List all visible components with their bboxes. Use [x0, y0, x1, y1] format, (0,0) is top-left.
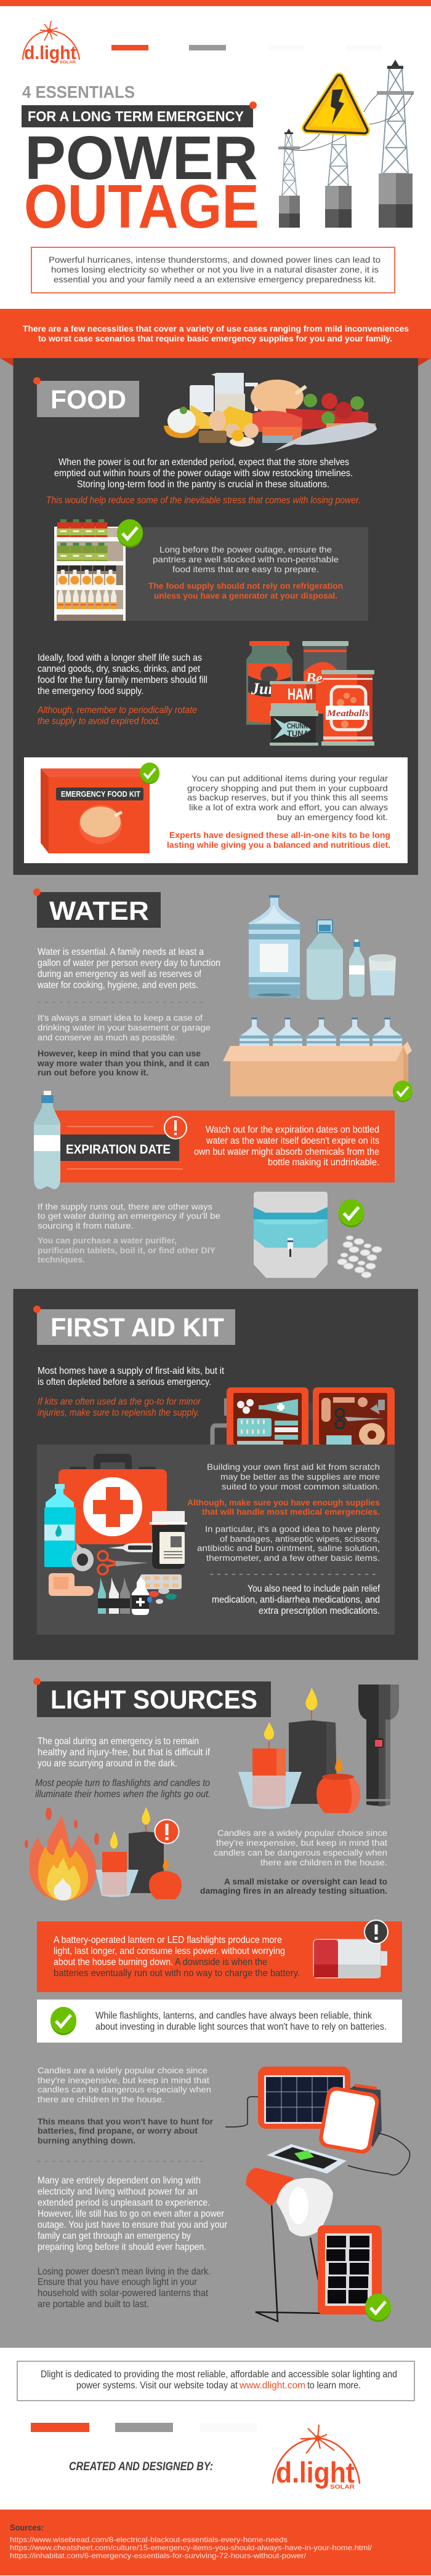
icon: warning [155, 1820, 179, 1843]
orange banner: There are a few necessities that cover a variety of use cases ranging from mild inconveniences [23, 324, 409, 333]
text block: case of water: and conserve as much as possible. [38, 1032, 177, 1042]
illustration: case of bottles [223, 1018, 412, 1096]
icon: warning [365, 1920, 388, 1944]
sub-panel: pantry: The food supply should not rely on refrigeration [148, 581, 343, 591]
illustration: candles and flashlight [238, 1685, 399, 1813]
sub-panel: building a kit [37, 1445, 395, 1635]
panel: food [14, 358, 418, 875]
beef can: Beef [305, 671, 335, 687]
intro text box: homes losing electricity so whether or not you live in a natural disaster zone, it is [51, 265, 379, 274]
text block: building kit: of bandages, antiseptic wipes, scissors, [220, 1534, 380, 1544]
candle in glass [238, 1722, 302, 1809]
orange banner: to worst case scenarios that require basic emergency supplies for you and your family. [38, 333, 392, 343]
text block: candles repeated: burning anything down. [38, 2135, 135, 2145]
text block: shelf life: the supply to avoid expired food. [38, 716, 160, 727]
tall tower [377, 60, 414, 228]
heading: light sources: LIGHT SOURCES [50, 1685, 257, 1715]
sub-panel: pantry: Long before the power outage, ensure the [159, 544, 332, 554]
text block: first-aid supply [38, 1366, 224, 1418]
text block: shelf life: Although, remember to periodically rotate [37, 705, 197, 716]
tuna can: CHUNK [287, 722, 308, 730]
callout: expiration date: EXPIRATION DATE [66, 1142, 171, 1157]
text block: candles repeated: there are children in the house. [38, 2094, 164, 2104]
ham can [270, 681, 318, 711]
text block: living without power: However, life still has to go on even after a power [38, 2209, 225, 2219]
text block: shelf life: canned goods, dry, snacks, drinks, and pet [38, 664, 200, 674]
intro text box: Powerful hurricanes, intense thunderstorms, and downed power lines can lead to [49, 255, 381, 265]
icon: check [50, 2007, 76, 2035]
heading: food [33, 377, 139, 417]
text block: first-aid supply: Most homes have a supply of first-aid kits, but it [38, 1366, 224, 1376]
callout: expiration date: Watch out for the expiration dates on bottled [206, 1125, 379, 1135]
callout: batteries: A downside is when the [175, 1957, 267, 1968]
callout: expiration date: own but water might absorb chemicals from the [194, 1147, 379, 1157]
large jug [249, 895, 300, 998]
icon: check [140, 763, 159, 784]
text block: candles repeated: Candles are a widely popular choice since [38, 2065, 207, 2075]
illustration: open first aid case [212, 1387, 395, 1446]
juice jar [246, 641, 292, 725]
text block: living without power [38, 2175, 228, 2310]
text block: living without power: preparing long before it should ever happen. [38, 2242, 206, 2252]
logo: d.light solar footer [273, 2425, 360, 2490]
text block: case of water: drinking water in your basement or garage [38, 1023, 211, 1032]
title [22, 82, 259, 241]
text block: candle dangers: damaging fires in an already testing situation. [200, 1886, 387, 1896]
illustration: food kit box: EMERGENCY FOOD KIT [61, 789, 140, 799]
illustration: medical supplies [44, 1454, 187, 1615]
text block: dark emergencies [35, 1736, 211, 1800]
heading: first aid kit: FIRST AID KIT [50, 1313, 224, 1342]
scissors [98, 1551, 148, 1574]
subtitle bar [22, 102, 257, 127]
middle tower [325, 134, 352, 228]
sub-panel: emergency food kit: buy an emergency food kit. [277, 812, 388, 822]
sources footer: https://www.wisebread.com/8-electrical-blackout-essentials-every-home-needs [10, 2535, 288, 2544]
text block: water needs: gallon of water per person every day to function [38, 958, 220, 968]
closing statement box: power systems. Visit our website today at [76, 2380, 238, 2391]
closing statement box [17, 2361, 414, 2401]
callout: expiration date [52, 1111, 395, 1182]
intro text box: essential you and your family need a an extensive emergency preparedness kit. [54, 274, 376, 284]
sub-panel: pantry: food items that are easy to prepare. [172, 564, 319, 574]
icon: check [339, 1199, 365, 1227]
juice jar: Juice [251, 680, 287, 698]
text block: water needs: Water is essential. A family needs at least a [38, 947, 204, 957]
text block: candles repeated: candles can be dangerous especially when [38, 2084, 211, 2094]
icon: battery [313, 1939, 387, 1978]
sub-panel: emergency food kit [24, 757, 408, 863]
callout: batteries: light, last longer, and consume less power. without worrying [54, 1946, 285, 1956]
loose pills [147, 1588, 177, 1604]
panel: first aid kit [14, 1289, 418, 1660]
text block: building kit: thermometer, and a few other basic items. [206, 1553, 380, 1563]
closing statement box: to learn more. [307, 2380, 361, 2391]
vials [98, 1577, 130, 1614]
text block: store shelves: When the power is out for an extended period, expect that the store shelves [58, 457, 349, 468]
water bottle [44, 1484, 76, 1567]
decorative bars bottom [31, 2423, 257, 2432]
illustration: candle group [95, 1807, 182, 1899]
pill bottle [150, 1511, 187, 1569]
small tower [278, 129, 300, 228]
text block: other water sources: to get water during an emergency if you'll be [38, 1211, 220, 1221]
text block: building kit: may be better as the supplies are more [220, 1472, 380, 1481]
heading: light sources [33, 1678, 271, 1717]
round candle [316, 1757, 360, 1813]
text block: case of water: way more water than you think, and it can [37, 1058, 209, 1068]
text block: case of water [37, 1013, 211, 1077]
icon: check [117, 519, 143, 548]
illustration: groceries [164, 373, 377, 451]
text block: pain relief [212, 1584, 380, 1616]
white medicine bottle [132, 1576, 149, 1615]
illustration: food kit box [41, 768, 150, 853]
ham can: HAM [288, 685, 313, 703]
illustration: fire [25, 1808, 99, 1900]
sources footer: https://inhabitat.com/6-emergency-essentials-for-surviving-72-hours-without-power/ [10, 2551, 307, 2560]
text block: first-aid supply: injuries, make sure to replenish the supply. [38, 1408, 199, 1418]
icon: warning [164, 1117, 187, 1139]
text block: candles repeated: they're inexpensive, but keep in mind that [38, 2075, 209, 2085]
text block: water needs: water for cooking, hygiene, and even pets. [37, 980, 198, 991]
callout: batteries: about the house burning down. [54, 1957, 173, 1968]
text block: dark emergencies: you are scurrying around in the dark. [38, 1758, 177, 1769]
sub-panel: emergency food kit: as backup reserves, but if you think this all seems [187, 792, 388, 802]
text block: candles repeated: This means that you won't have to hunt for [38, 2116, 214, 2126]
text block: building kit: Although, make sure you have enough supplies [187, 1497, 380, 1507]
credit line: CREATED AND DESIGNED BY: [69, 2460, 213, 2473]
text block: first-aid supply: If kits are often used as the go-to for minor [38, 1397, 201, 1407]
text block: first-aid supply: is often depleted before a serious emergency. [38, 1377, 211, 1387]
callout: expiration date: bottle making it undrinkable. [268, 1157, 379, 1168]
closing statement box: www.dlight.com [239, 2380, 305, 2391]
solar panel [225, 2067, 350, 2129]
text block: shelf life [37, 653, 207, 727]
logo: d.light solar footer: SOLAR [330, 2484, 355, 2490]
text block: candles repeated: batteries, find propane, or worry about [38, 2126, 198, 2135]
sub-panel: pantry [54, 519, 368, 621]
illustration: solar lantern kit [225, 2067, 410, 2322]
illustration: canned goods [246, 641, 374, 746]
orange banner [0, 309, 431, 366]
callout: batteries: A battery-operated lantern or LED flashlights produce more [54, 1935, 282, 1945]
text block: other water sources: You can purchase a water purifier, [38, 1235, 177, 1245]
wires [283, 94, 413, 150]
text block: building kit: antibiotic and burn ointment, saline solution, [197, 1543, 380, 1553]
text block: candle dangers [200, 1828, 387, 1896]
text block: shelf life: Ideally, food with a longer shelf life such as [38, 653, 202, 663]
heading: power: POWER [25, 124, 258, 193]
illustration: water purifier [254, 1192, 328, 1278]
subtitle: 4 essentials: 4 ESSENTIALS [22, 82, 135, 102]
text block: water needs: during an emergency as well as reserves of [38, 969, 201, 979]
illustration: plastic bottle [34, 1091, 60, 1189]
text block: dark emergencies: Most people turn to flashlights and candles to [35, 1778, 210, 1788]
callout: durable light sources: While flashlights, lanterns, and candles have always been reliable, think [95, 2011, 373, 2021]
sources footer [0, 2510, 431, 2575]
heading: water: WATER [49, 896, 149, 926]
sub-panel: emergency food kit: like a lot of extra work and effort, you can always [189, 802, 388, 812]
text block: shelf life: the emergency food supply. [38, 686, 143, 696]
heading: food: FOOD [50, 385, 126, 415]
medium bottle [307, 920, 343, 1000]
logo: d.light solar [23, 21, 79, 65]
heading: outage: OUTAGE [24, 172, 259, 241]
heading: water [33, 888, 161, 928]
bandages [49, 1573, 94, 1596]
text block: building kit [187, 1462, 380, 1563]
text block: living without power: outage. You just have to ensure that you and your [38, 2220, 228, 2230]
text block: case of water: run out before you know it. [38, 1067, 148, 1077]
text block: dark emergencies: healthy and injury-free, but that is difficult if [38, 1747, 211, 1758]
logo: d.light solar: SOLAR [60, 61, 76, 65]
desk lamp [246, 2167, 333, 2321]
text block: candle dangers: candles can be dangerous especially when [214, 1848, 387, 1857]
text block: building kit: In particular, it's a good idea to have plenty [205, 1524, 380, 1534]
meatballs can: Meatballs [326, 709, 369, 719]
tall dark candle [289, 1688, 337, 1804]
text block: living without power: family can get through an emergency by [38, 2231, 191, 2241]
text block: living without power: electricity and living without power for an [38, 2187, 198, 2197]
glass [369, 954, 396, 995]
lantern [318, 2084, 410, 2175]
text block: other water sources: If the supply runs out, there are other ways [38, 1202, 212, 1211]
callout: durable light sources [37, 2000, 402, 2043]
text block: pain relief: You also need to include pain relief [248, 1584, 380, 1594]
text block: store shelves: This would help reduce some of the inevitable stress that comes with losing power. [46, 495, 361, 506]
text block: other water sources [38, 1202, 220, 1264]
sub-panel: pantry: unless you have a generator at your disposal. [154, 591, 337, 600]
text block: dark emergencies: illuminate their homes when the lights go out. [35, 1789, 211, 1800]
icon: warning sign [307, 78, 365, 130]
illustration: pantry shelf [54, 519, 126, 621]
bandage tape roll [71, 1543, 94, 1571]
flashlight [358, 1685, 399, 1806]
text block: building kit: Building your own first aid kit from scratch [207, 1462, 380, 1472]
text block: living without power: household with solar-powered lanterns that [38, 2288, 208, 2299]
text block: building kit: suited to your most common situation. [222, 1481, 380, 1491]
illustration: water bottles [249, 895, 396, 1000]
text block: water needs [37, 947, 220, 991]
sources footer: Sources: [10, 2522, 44, 2532]
section: light sources [25, 1678, 410, 2322]
text block: pain relief: medication, anti-diarrhea medications, and [212, 1595, 380, 1605]
text block: living without power: Many are entirely dependent on living with [38, 2175, 201, 2186]
text block: candle dangers: A small mistake or oversight can lead to [224, 1876, 387, 1886]
sub-panel: emergency food kit: You can put additional items during your regular [191, 773, 388, 783]
logo: d.light solar footer: d.light [276, 2456, 355, 2489]
text block: living without power: are portable and built to last. [38, 2299, 149, 2310]
small solar panel [318, 2225, 382, 2315]
text block: other water sources: purification tablets, boil it, or find other DIY [38, 1245, 216, 1255]
text block: case of water: It's always a smart idea to keep a case of [38, 1013, 203, 1023]
intro text box [31, 247, 395, 293]
callout: batteries [37, 1920, 402, 1992]
text block: dark emergencies: The goal during an emergency is to remain [38, 1736, 199, 1747]
decorative bars top [111, 45, 382, 50]
section: water [33, 888, 413, 1278]
blister pack [140, 1574, 182, 1589]
sub-panel: pantry: pantries are well stocked with non-perishable [153, 554, 339, 564]
text block: living without power: Losing power doesn't mean living in the dark. [38, 2267, 211, 2277]
text block: living without power: extended period is unpleasant to experience. [38, 2198, 210, 2208]
text block: other water sources: techniques. [38, 1254, 85, 1264]
meatballs can [321, 670, 374, 746]
text block: candle dangers: Candles are a widely popular choice since [217, 1828, 387, 1838]
callout: durable light sources: about investing in durable light sources that won't have to rely on batteries. [95, 2022, 387, 2032]
text block: case of water: However, keep in mind that you can use [38, 1048, 201, 1058]
illustration: power towers with warning sign [278, 60, 414, 228]
beef can [302, 641, 348, 714]
callout: batteries: batteries eventually run out with no way to charge the battery. [54, 1968, 300, 1979]
text block: other water sources: sourcing it from nature. [38, 1221, 134, 1230]
tuna can: TUNA [287, 728, 309, 738]
heading: first aid kit [33, 1306, 235, 1345]
tuna can [270, 711, 318, 746]
icon: check [393, 1081, 413, 1102]
text block: candle dangers: they're inexpensive, but keep in mind that [216, 1838, 387, 1848]
text block: store shelves: emptied out within hours of the power outage with slow restocking timelines. [54, 468, 353, 479]
section background [0, 358, 431, 2348]
sub-panel: emergency food kit: Experts have designed these all-in-one kits to be long [169, 830, 390, 840]
text block: shelf life: food for the furry family members should fill [38, 675, 207, 685]
sources footer: https://www.cheatsheet.com/culture/15-emergency-items-you-should-always-have-in-your-home.html/ [10, 2543, 373, 2552]
text block: building kit: that will handle most medical emergencies. [202, 1507, 380, 1517]
text block: candles repeated [38, 2065, 214, 2145]
text block: store shelves: Storing long-term food in the pantry is crucial in these situations. [77, 479, 329, 490]
sub-panel: emergency food kit: lasting while giving you a balanced and nutritious diet. [167, 840, 390, 850]
thermometer [108, 1543, 153, 1552]
illustration: purification tablets [337, 1235, 382, 1278]
callout: expiration date: water as the water itself doesn't expire on its [206, 1136, 379, 1146]
subtitle bar: FOR A LONG TERM EMERGENCY [28, 108, 244, 124]
small bottle [349, 939, 365, 997]
icon: check [365, 2294, 391, 2322]
logo: d.light solar: d.light [24, 42, 76, 63]
top orange strip [0, 0, 431, 6]
phone [267, 2144, 347, 2174]
text block: store shelves [46, 457, 361, 506]
text block: living without power: Ensure that you have enough light in your [38, 2277, 198, 2287]
sub-panel: emergency food kit: grocery shopping and put them in your cupboard [187, 783, 388, 793]
text block: pain relief: extra prescription medications. [259, 1606, 380, 1616]
text block: candle dangers: there are children in the house. [260, 1857, 387, 1867]
